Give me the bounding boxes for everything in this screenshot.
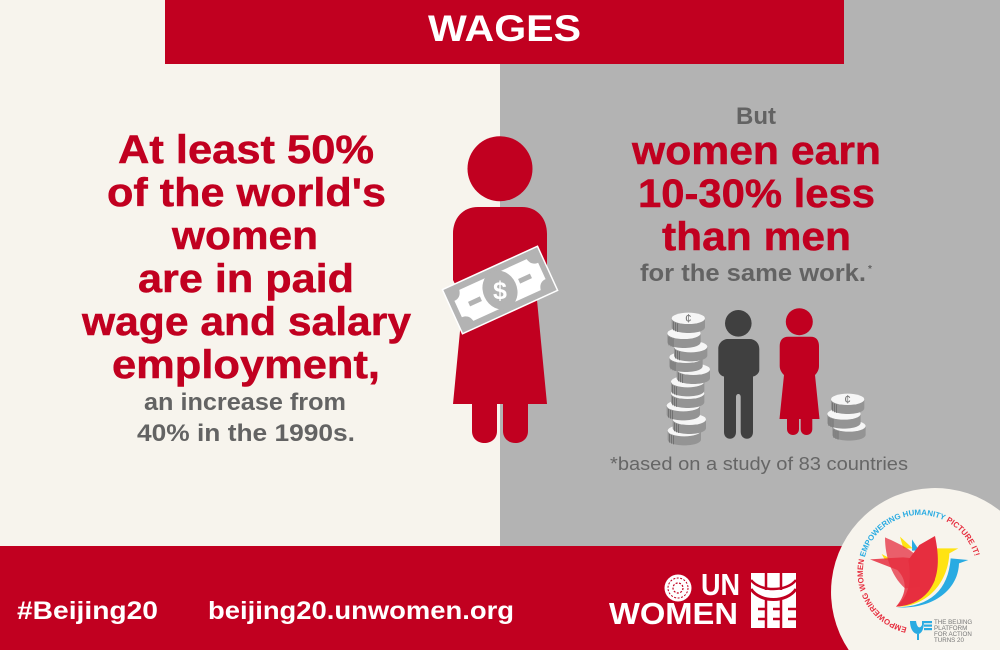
icon: tall coin stack: [667, 312, 710, 445]
text block: left statistic: 40% in the 1990s.: [137, 420, 355, 447]
title banner: WAGES: [428, 8, 581, 49]
badge: Beijing Platform for Action: [831, 488, 1000, 650]
footnote: *based on a study of 83 countries: [610, 454, 908, 474]
text block: left statistic: employment,: [112, 343, 380, 387]
text block: right statistic: 10-30% less: [638, 172, 875, 216]
icon: man: [718, 310, 759, 439]
icon: banknote: [441, 245, 559, 335]
text block: left statistic: are in paid: [138, 257, 354, 301]
icon: Beijing platform symbol: [910, 621, 932, 640]
title banner: [165, 0, 844, 64]
footer band: [0, 546, 1000, 650]
woman figure: [453, 136, 547, 443]
badge caption: THE BEIJING: [934, 619, 972, 626]
text block: right statistic: than men: [662, 215, 851, 259]
text block: right statistic: women earn: [631, 129, 881, 173]
icon: short coin stack: ¢: [844, 393, 851, 407]
logo: UN Women: UN: [701, 567, 740, 602]
icon: UN globe: [664, 574, 692, 602]
text block: left statistic: wage and salary: [81, 300, 412, 344]
text block: right statistic: *: [868, 264, 872, 275]
logo: UN Women: WOMEN: [609, 596, 738, 631]
text block: left statistic: of the world's: [107, 171, 386, 215]
text block: left statistic: women: [171, 214, 318, 258]
circular slogan: EMPOWERING WOMEN EMPOWERING HUMANITY PICTURE IT!: [857, 510, 980, 633]
icon: woman holding banknote: [441, 136, 559, 443]
website: beijing20.unwomen.org: [208, 597, 514, 625]
icon: UN Women emblem: [751, 573, 796, 628]
hashtag: #Beijing20: [17, 597, 158, 625]
badge caption: [934, 619, 972, 644]
icon: dove: [870, 536, 968, 607]
badge caption: FOR ACTION: [934, 631, 972, 638]
text block: left statistic: At least 50%: [118, 128, 374, 172]
text block: right statistic: But: [736, 103, 776, 130]
icon: small woman: [780, 308, 820, 435]
logo: UN Women: [609, 567, 796, 631]
badge caption: PLATFORM: [934, 625, 967, 632]
icon: tall coin stack: ¢: [685, 312, 692, 326]
panel: left background: [0, 0, 500, 546]
text block: left statistic: an increase from: [144, 389, 346, 416]
panel: right background: [500, 0, 1000, 546]
badge caption: TURNS 20: [934, 637, 964, 644]
text block: right statistic: for the same work.: [640, 260, 866, 287]
text block: right statistic: [631, 103, 881, 287]
text block: left statistic: [81, 128, 412, 447]
icon: banknote: $: [493, 277, 507, 305]
icon: short coin stack: [827, 393, 866, 441]
